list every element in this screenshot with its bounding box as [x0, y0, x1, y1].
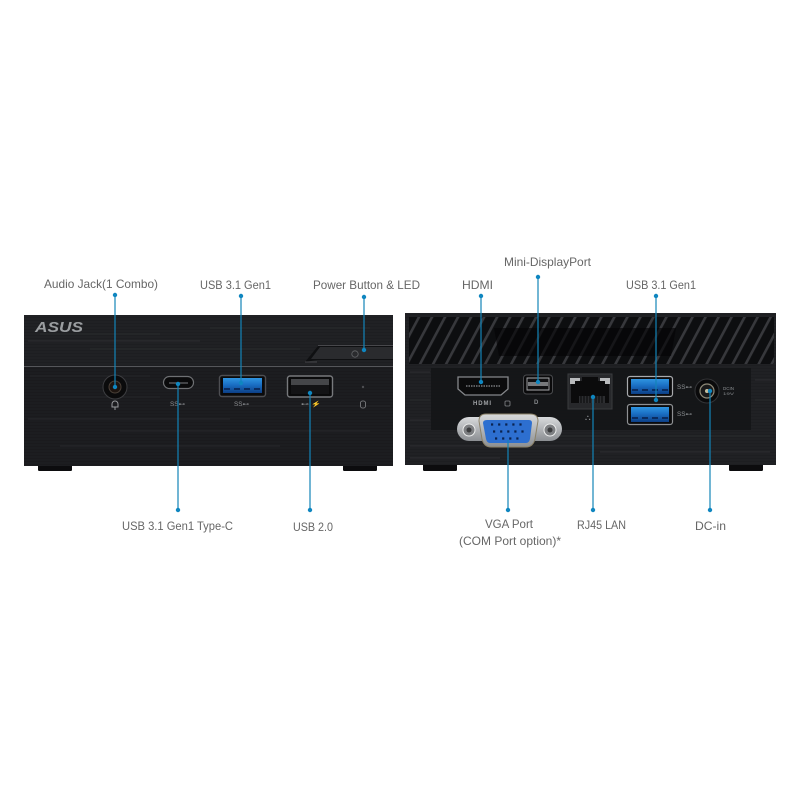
front chassis	[24, 315, 393, 466]
USB 3.1 ports rear: SS⊷	[677, 412, 692, 418]
callout: DC-in: DC-in	[695, 519, 726, 533]
callout: DC-in	[695, 389, 726, 533]
front feet	[38, 465, 377, 471]
callout: HDMI	[462, 278, 493, 384]
rear feet	[423, 465, 763, 471]
callout: VGA port: (COM Port option)*	[459, 534, 561, 548]
callout: Mini-DisplayPort	[504, 255, 592, 384]
callout: HDMI: HDMI	[462, 278, 493, 292]
HDMI port	[458, 377, 510, 407]
Mini-DisplayPort: D	[534, 400, 539, 406]
USB 3.1 ports rear	[628, 376, 692, 424]
USB 3.1 port front	[220, 376, 266, 408]
rear brushed highlights	[410, 372, 775, 458]
USB 2.0 port	[288, 376, 332, 408]
RJ45 LAN port: ⛬	[585, 413, 591, 422]
callout: power button: Power Button & LED	[313, 278, 420, 292]
callout: USB 3.1 Gen1 rear: USB 3.1 Gen1	[626, 278, 696, 292]
callout: Mini-DisplayPort: Mini-DisplayPort	[504, 255, 592, 269]
rear chassis	[405, 313, 776, 465]
ASUS logo: ASUS	[34, 319, 83, 336]
callout: USB-C: USB 3.1 Gen1 Type-C	[122, 519, 233, 533]
callout: USB 2.0	[293, 391, 333, 534]
front brushed highlights	[28, 328, 390, 446]
USB 2.0 port: ⊷ ⚡	[301, 400, 321, 408]
vent grille	[409, 317, 774, 364]
power button	[305, 346, 393, 362]
callout: RJ45 LAN	[577, 395, 626, 532]
callout: VGA port: VGA Port	[485, 517, 534, 531]
rear IO plate	[431, 368, 751, 430]
VGA port	[457, 414, 562, 447]
front panel seam	[24, 366, 393, 368]
front lower shade	[24, 367, 393, 466]
HDMI port: HDMI	[473, 401, 491, 407]
callout: power button	[313, 278, 420, 352]
rear view mini PC	[405, 313, 776, 471]
USB 3.1 ports rear: SS⊷	[677, 385, 692, 391]
callout: audio jack: Audio Jack(1 Combo)	[44, 277, 158, 291]
activity LED	[360, 386, 366, 408]
callout: USB 3.1 Gen1 rear	[626, 278, 696, 402]
audio jack	[103, 375, 127, 410]
DC-in jack	[695, 379, 735, 403]
DC-in jack: 19V	[723, 391, 735, 396]
callout: USB 3.1 Gen1 front: USB 3.1 Gen1	[200, 278, 271, 292]
callout: USB 3.1 Gen1 front	[200, 278, 271, 385]
USB-C port	[164, 376, 194, 408]
callout: audio jack	[44, 277, 158, 389]
callout: VGA port	[459, 440, 561, 548]
callout: USB-C	[122, 382, 233, 533]
USB-C port: SS⊷	[170, 402, 185, 408]
callout: RJ45 LAN: RJ45 LAN	[577, 518, 626, 532]
front view mini PC	[24, 315, 393, 471]
USB 3.1 port front: SS⊷	[234, 402, 249, 408]
DC-in jack: DCIN	[723, 386, 734, 391]
RJ45 LAN port	[568, 374, 612, 422]
Mini-DisplayPort	[524, 375, 552, 406]
callout: USB 2.0: USB 2.0	[293, 520, 333, 534]
